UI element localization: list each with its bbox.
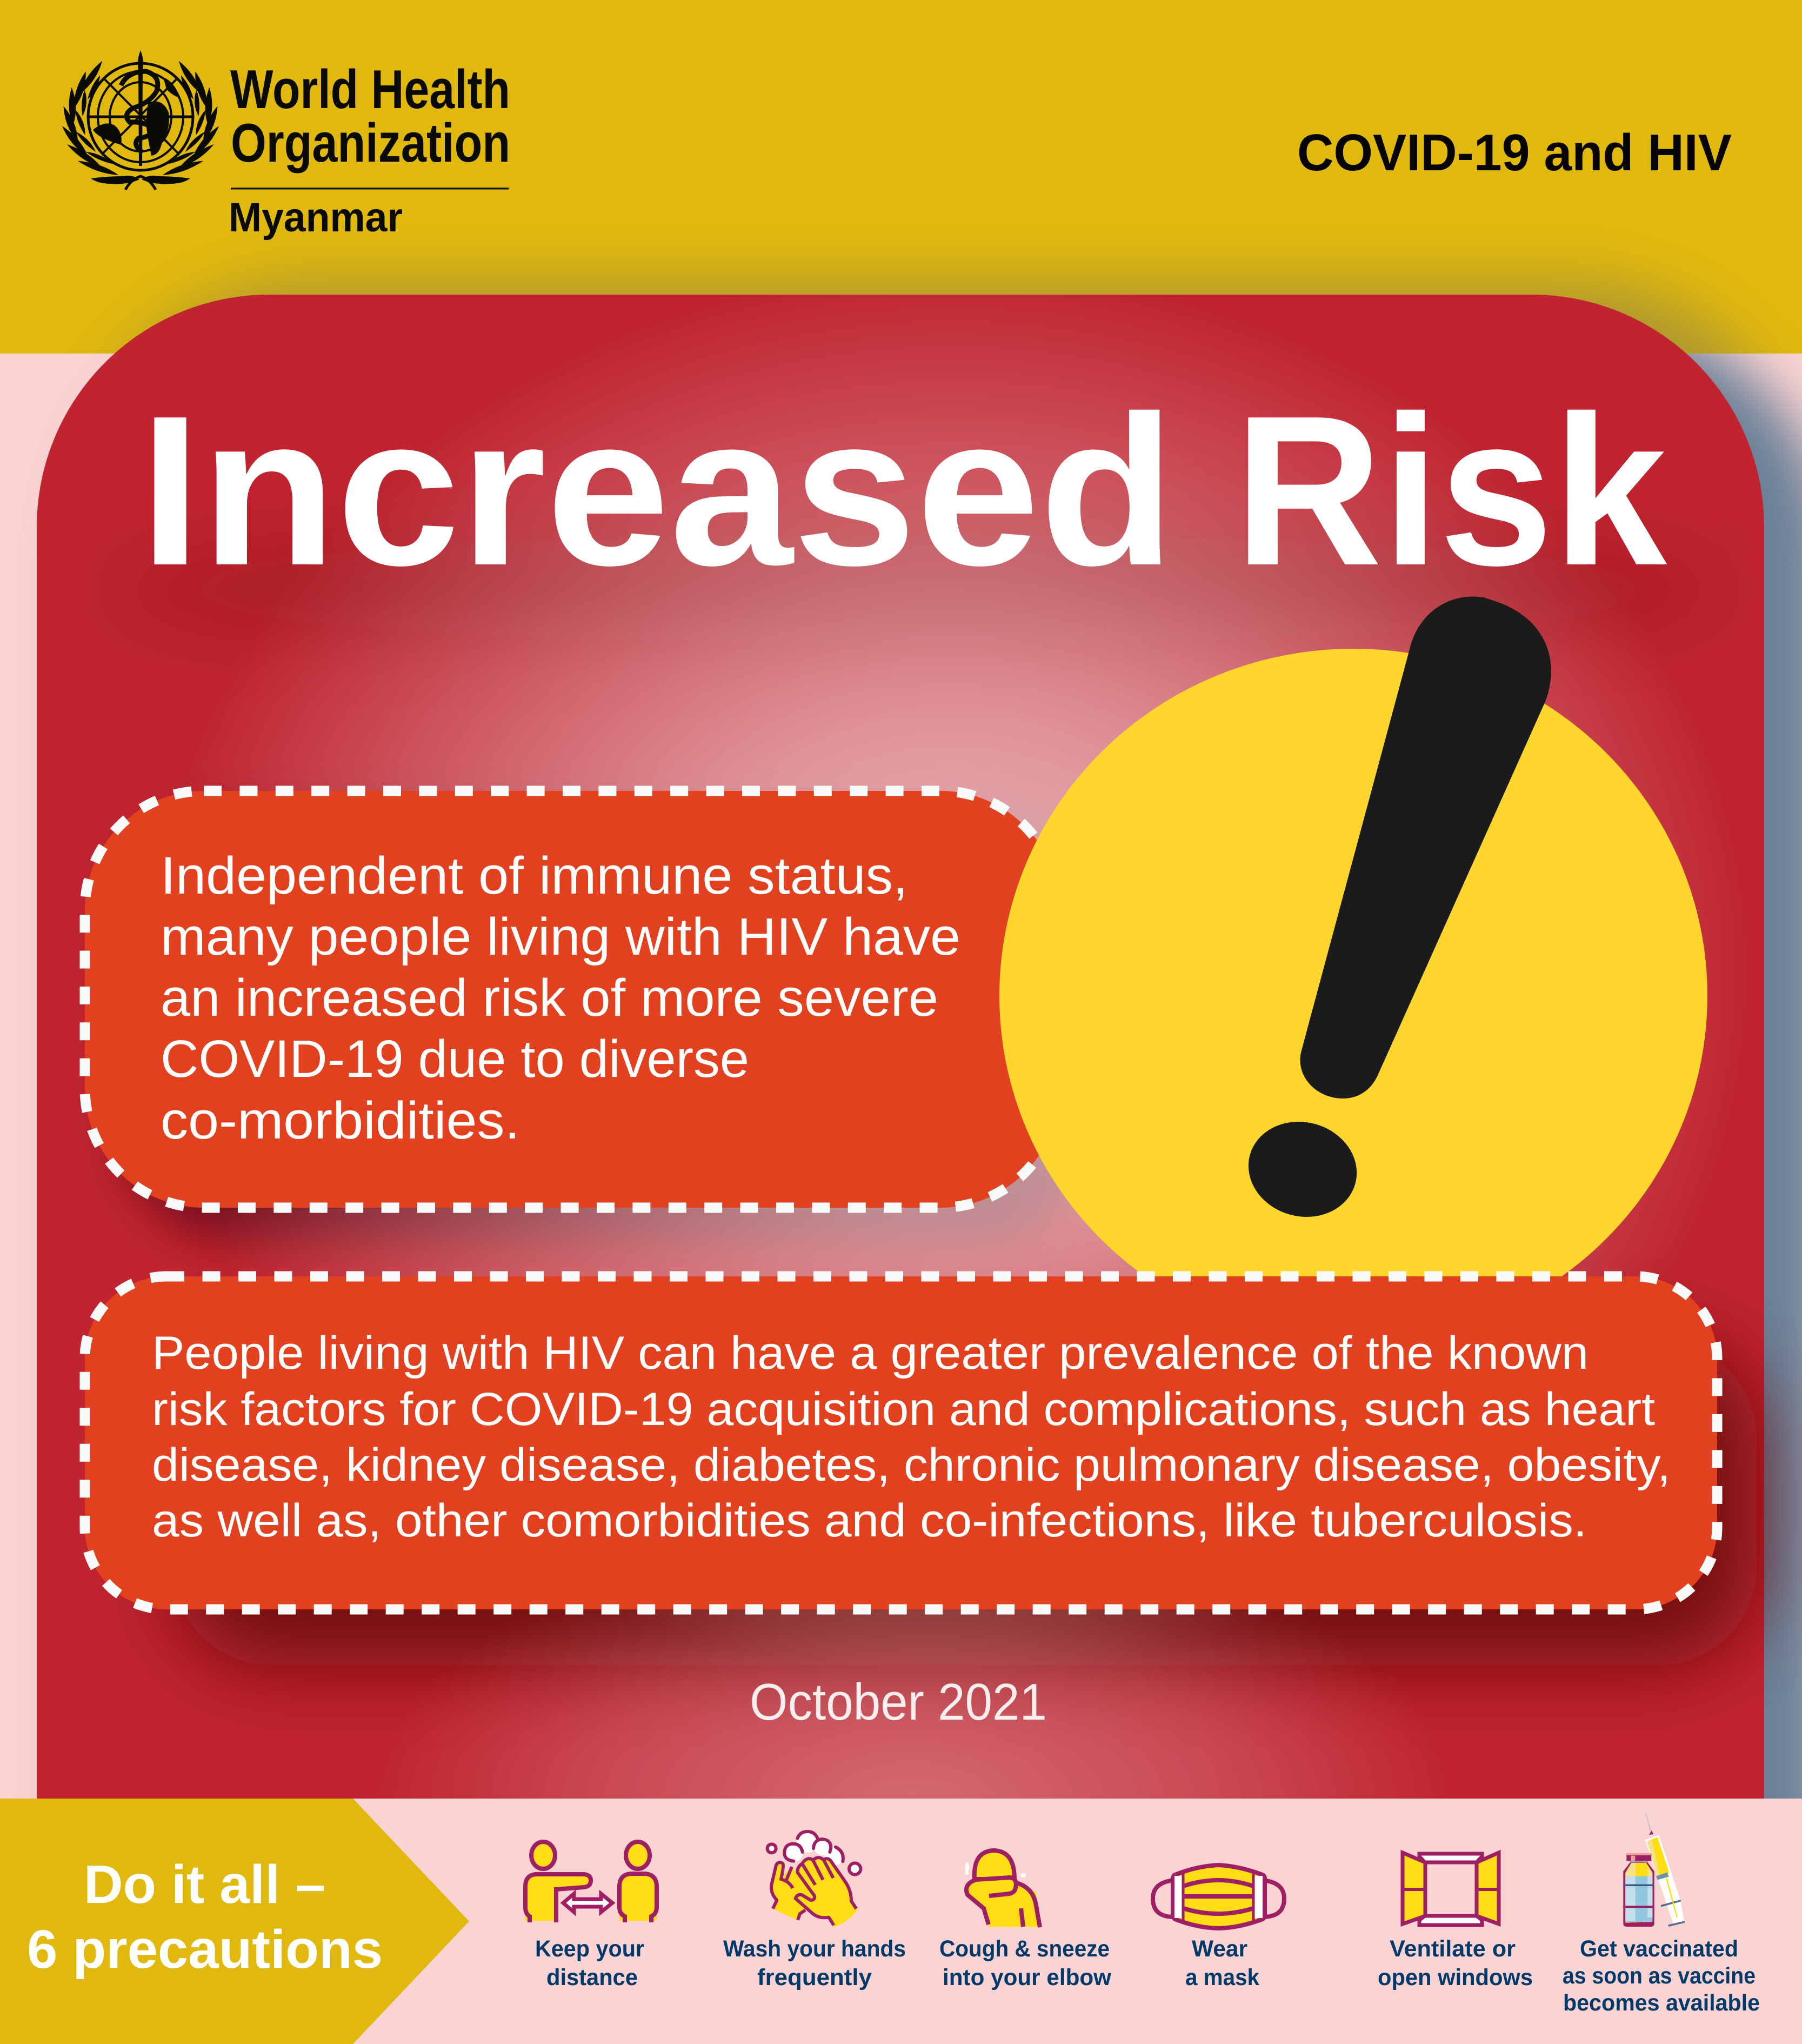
icon: open window xyxy=(1403,1853,1499,1925)
arrow banner xyxy=(0,1799,469,2044)
callout: upper box xyxy=(85,791,1059,1208)
label xyxy=(1563,1936,1760,2016)
lower box text xyxy=(152,1327,1671,1547)
upper box text: an increased risk of more severe xyxy=(161,968,938,1027)
precaution: wear a mask xyxy=(1153,1865,1284,1990)
label: becomes available xyxy=(1563,1990,1760,2016)
upper box text: co-morbidities. xyxy=(161,1091,520,1150)
label xyxy=(939,1936,1112,1990)
lower box text: risk factors for COVID-19 acquisition and complications, such as heart xyxy=(152,1383,1655,1435)
main title xyxy=(139,371,1668,610)
shadow: lower box xyxy=(173,1341,1757,1665)
main title: Risk xyxy=(1234,371,1668,610)
label: open windows xyxy=(1378,1965,1533,1990)
banner line 2: 6 precautions xyxy=(27,1919,383,1980)
precaution: wash hands xyxy=(723,1831,906,1990)
WHO logo xyxy=(62,52,510,241)
label: into your elbow xyxy=(943,1965,1112,1990)
label: Get vaccinated xyxy=(1580,1936,1738,1962)
label: Wash your hands xyxy=(723,1936,906,1962)
label xyxy=(535,1936,644,1990)
label: as soon as vaccine xyxy=(1563,1963,1756,1989)
upper box text: COVID-19 due to diverse xyxy=(161,1029,749,1088)
icon: WHO emblem xyxy=(62,52,219,190)
exclamation dot xyxy=(1238,1110,1367,1229)
upper box text: Independent of immune status, xyxy=(161,846,908,905)
header title: COVID-19 and HIV xyxy=(1297,124,1732,182)
icon: vaccine vial and syringe xyxy=(1623,1814,1685,1927)
upper box text: many people living with HIV have xyxy=(161,907,960,966)
icon: two people apart xyxy=(525,1842,657,1922)
label xyxy=(723,1936,906,1990)
lower box text: People living with HIV can have a greater prevalence of the known xyxy=(152,1327,1589,1379)
label: frequently xyxy=(757,1965,872,1990)
icon: washing hands xyxy=(767,1831,860,1927)
upper box text xyxy=(161,846,960,1150)
logo text: Myanmar: Myanmar xyxy=(229,195,403,241)
precaution: cough into elbow xyxy=(939,1850,1112,1990)
lower box text: as well as, other comorbidities and co-infections, like tuberculosis. xyxy=(152,1495,1587,1547)
logo text: World Health: World Health xyxy=(230,59,510,120)
yellow circle xyxy=(999,649,1707,1343)
lower box text: disease, kidney disease, diabetes, chronic pulmonary disease, obesity, xyxy=(152,1439,1671,1491)
label xyxy=(1185,1936,1259,1990)
panel: light glows xyxy=(37,295,1764,1799)
date: October 2021 xyxy=(750,1673,1047,1731)
label: distance xyxy=(546,1965,638,1990)
icon: face mask xyxy=(1153,1865,1284,1928)
panel shadow on header xyxy=(108,255,1773,354)
label: Keep your xyxy=(535,1936,644,1962)
label: Cough & sneeze xyxy=(939,1936,1110,1962)
precaution: get vaccinated xyxy=(1563,1814,1760,2016)
icon: exclamation sign xyxy=(999,596,1707,1343)
label: a mask xyxy=(1185,1965,1259,1990)
panel: red background xyxy=(37,295,1764,1799)
header band xyxy=(0,0,1802,354)
panel: precautions strip xyxy=(0,1799,1802,2044)
label: Ventilate or xyxy=(1390,1936,1516,1962)
precaution: keep your distance xyxy=(525,1842,657,1990)
callout: lower box xyxy=(85,1276,1717,1609)
label: Wear xyxy=(1192,1936,1247,1962)
exclamation bar xyxy=(1300,596,1551,1098)
logo text: Organization: Organization xyxy=(231,113,510,174)
label xyxy=(1378,1936,1533,1990)
precaution: ventilate xyxy=(1378,1853,1533,1990)
banner line 1: Do it all – xyxy=(84,1854,325,1915)
main title: Increased xyxy=(139,371,1175,610)
icon: person coughing into elbow xyxy=(965,1850,1040,1927)
panel shadow on background xyxy=(1686,354,1802,1799)
